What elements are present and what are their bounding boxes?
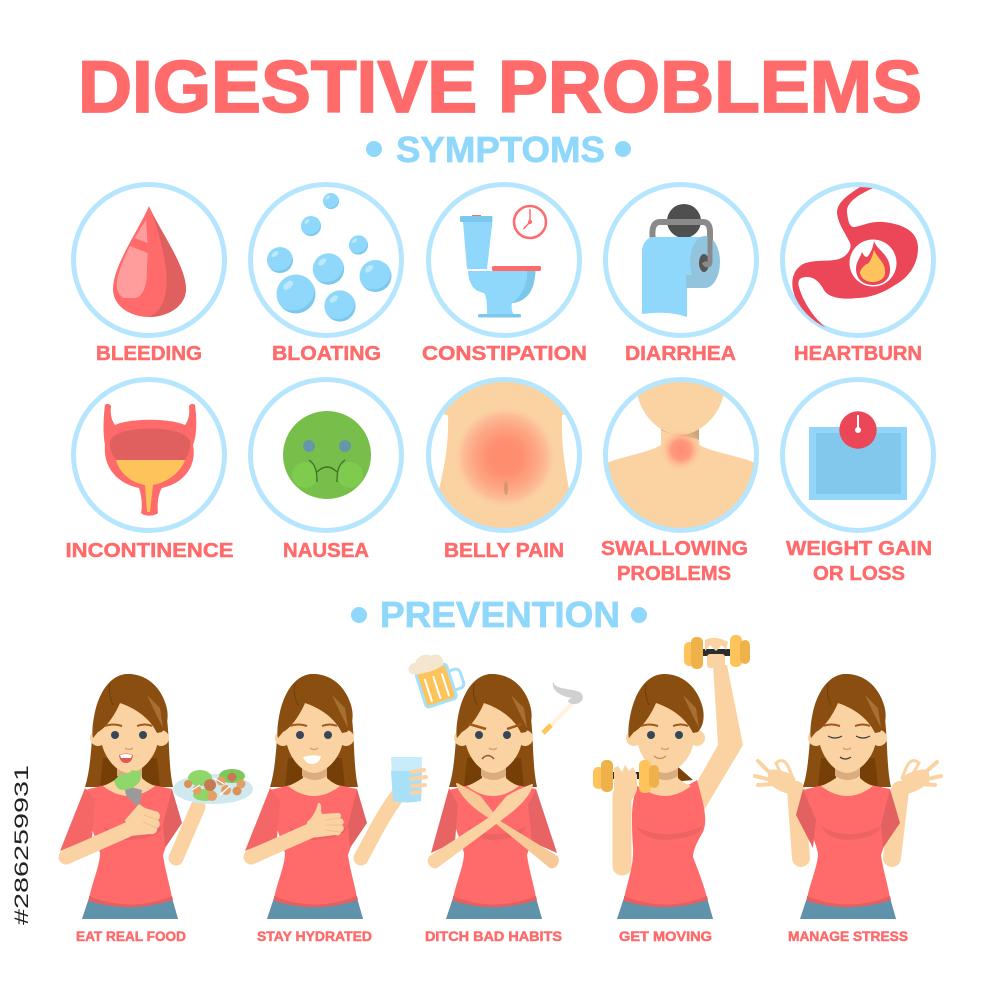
arm: holding glass: [361, 757, 426, 858]
heading: prevention: PREVENTION: [380, 594, 620, 635]
symptom: weight gain or loss: [782, 380, 934, 585]
icon: bubbles: [267, 193, 392, 322]
symptom: bleeding: [74, 184, 224, 365]
sleeves: [431, 788, 458, 853]
figure: eat real food: EAT REAL FOOD: [76, 929, 186, 944]
symptom: belly pain: BELLY PAIN: [444, 539, 564, 562]
figure: manage stress: [755, 674, 941, 944]
icon: sick face: [283, 411, 371, 499]
symptom: swallowing problems: [601, 377, 759, 580]
symptom: nausea: [250, 380, 402, 562]
icon: stomach with flame: [792, 187, 918, 328]
symptom: heartburn: HEARTBURN: [794, 342, 922, 365]
mouth: open: [119, 754, 133, 763]
arm: hand with fork: [66, 770, 160, 857]
arms: [796, 790, 900, 858]
icon: toilet paper: [642, 204, 720, 317]
symptom: constipation: [422, 184, 587, 365]
figure: ditch bad habits: DITCH BAD HABITS: [425, 929, 562, 944]
right hand: [900, 761, 941, 794]
symptom: diarrhea: DIARRHEA: [625, 342, 736, 365]
stock id: #286259931: [12, 765, 33, 925]
icon: toilet and clock: [460, 206, 546, 318]
plate of salad: [173, 769, 253, 804]
symptom: bloating: BLOATING: [272, 342, 381, 365]
title: DIGESTIVE PROBLEMS: [78, 47, 922, 128]
lower arm with dumbbell: [593, 760, 659, 866]
symptom: swallowing problems: SWALLOWING: [601, 537, 748, 560]
symptom: bloating: [250, 184, 402, 365]
symptom: incontinence: [66, 380, 234, 562]
angry brows and frown: [469, 724, 522, 759]
symptom: heartburn: [782, 184, 934, 365]
raised arm: [697, 665, 743, 812]
symptom: nausea: NAUSEA: [283, 539, 369, 562]
symptom: diarrhea: [606, 184, 756, 365]
icon: blood drop: [113, 206, 186, 317]
tank top and jeans: [617, 780, 713, 919]
figure: get moving: [593, 635, 750, 944]
icon: cigarette: [543, 682, 583, 733]
sleeves: [796, 789, 816, 848]
figure: stay hydrated: STAY HYDRATED: [257, 929, 372, 944]
icon: belly: [439, 382, 569, 528]
symptom: weight gain or loss: WEIGHT GAIN: [786, 537, 932, 560]
figure: eat real food: [60, 674, 253, 944]
mouth: smile: [303, 755, 321, 764]
figure: get moving: GET MOVING: [619, 929, 712, 944]
symptom: incontinence: INCONTINENCE: [66, 539, 234, 562]
icon: bladder: [104, 404, 196, 516]
arm: plate arm: [176, 807, 198, 858]
heading: symptoms: SYMPTOMS: [396, 129, 605, 170]
ponytail: [672, 766, 693, 782]
top dumbbell: [684, 635, 750, 669]
symptom: constipation: CONSTIPATION: [422, 342, 587, 365]
icon: neck: [608, 382, 754, 528]
closed eyes and smile: [828, 736, 870, 759]
symptom: weight gain or loss: OR LOSS: [813, 562, 905, 585]
mouth: smile: [654, 756, 666, 758]
figure: stay hydrated: [245, 674, 426, 944]
figure: ditch bad habits: [405, 646, 583, 944]
symptom: swallowing problems: PROBLEMS: [617, 562, 731, 585]
left hand: [755, 761, 796, 794]
symptom: belly pain: [428, 370, 580, 562]
icon: scale: [809, 411, 907, 500]
symptom: bleeding: BLEEDING: [96, 342, 202, 365]
figure: manage stress: MANAGE STRESS: [788, 929, 908, 944]
crossed arms: [429, 784, 558, 867]
icon: beer mug: [405, 646, 468, 709]
